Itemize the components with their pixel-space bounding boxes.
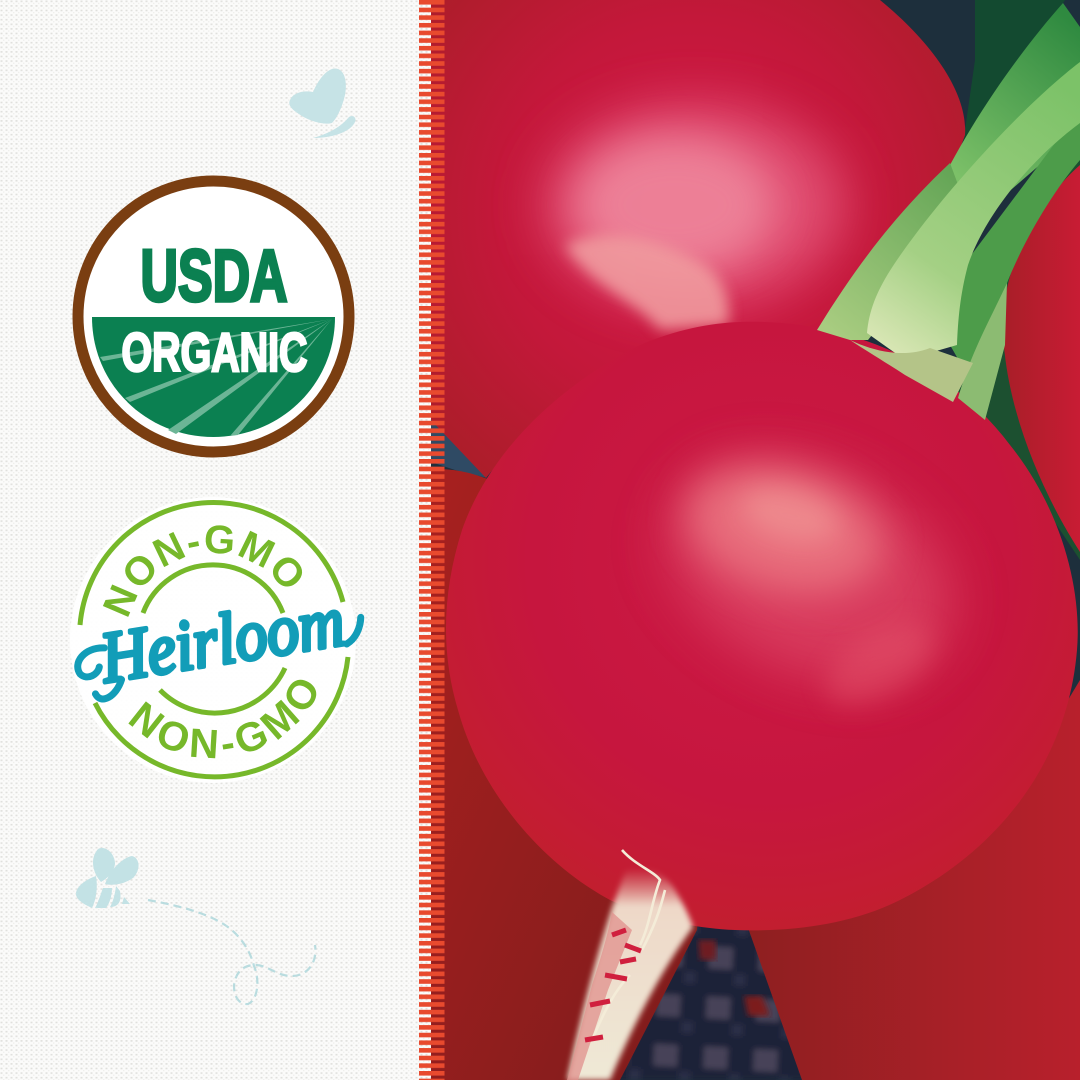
USDA wordmark: USDA: [140, 236, 288, 317]
outer and inner green rings: [80, 502, 348, 777]
lower right leaves: [951, 130, 1080, 362]
dark backdrop cloth and foliage: [431, 0, 1080, 1080]
lower-left radish: [431, 469, 700, 1080]
radish photograph: [431, 0, 1080, 1080]
bee icon with dashed flight path: [76, 848, 315, 1004]
brown ring: [78, 181, 349, 452]
lower-right radish: [747, 680, 1080, 1080]
bee: [76, 848, 139, 908]
ORGANIC wordmark: ORGANIC: [122, 321, 308, 383]
linen background panel: [0, 0, 432, 1080]
sheath leaf: [817, 163, 960, 340]
right radish: [1003, 165, 1080, 552]
radish leaves and stem: [817, 3, 1080, 420]
NON-GMO top text: NON-GMO: [102, 525, 302, 617]
stem collar: [850, 340, 973, 402]
Non-GMO Heirloom seal: [70, 497, 364, 783]
back leaf: [950, 3, 1080, 190]
blue cloth wedge at left: [431, 418, 487, 478]
checked cloth at the bottom: [620, 926, 802, 1080]
dashed flight path: [148, 900, 315, 1004]
NON-GMO bottom text: NON-GMO: [128, 680, 316, 758]
green field: [92, 317, 335, 437]
main stem: [867, 62, 1080, 360]
main radish: [446, 322, 1078, 930]
butterfly icon: [289, 68, 356, 138]
main radish highlight: [655, 446, 965, 693]
taproot: [567, 850, 693, 1080]
upper radish: [431, 0, 965, 478]
white halo: [70, 497, 356, 783]
USDA Organic seal: [78, 181, 349, 452]
orange striped divider: [419, 0, 444, 1080]
Heirloom script word: Heirloom: [94, 581, 350, 698]
